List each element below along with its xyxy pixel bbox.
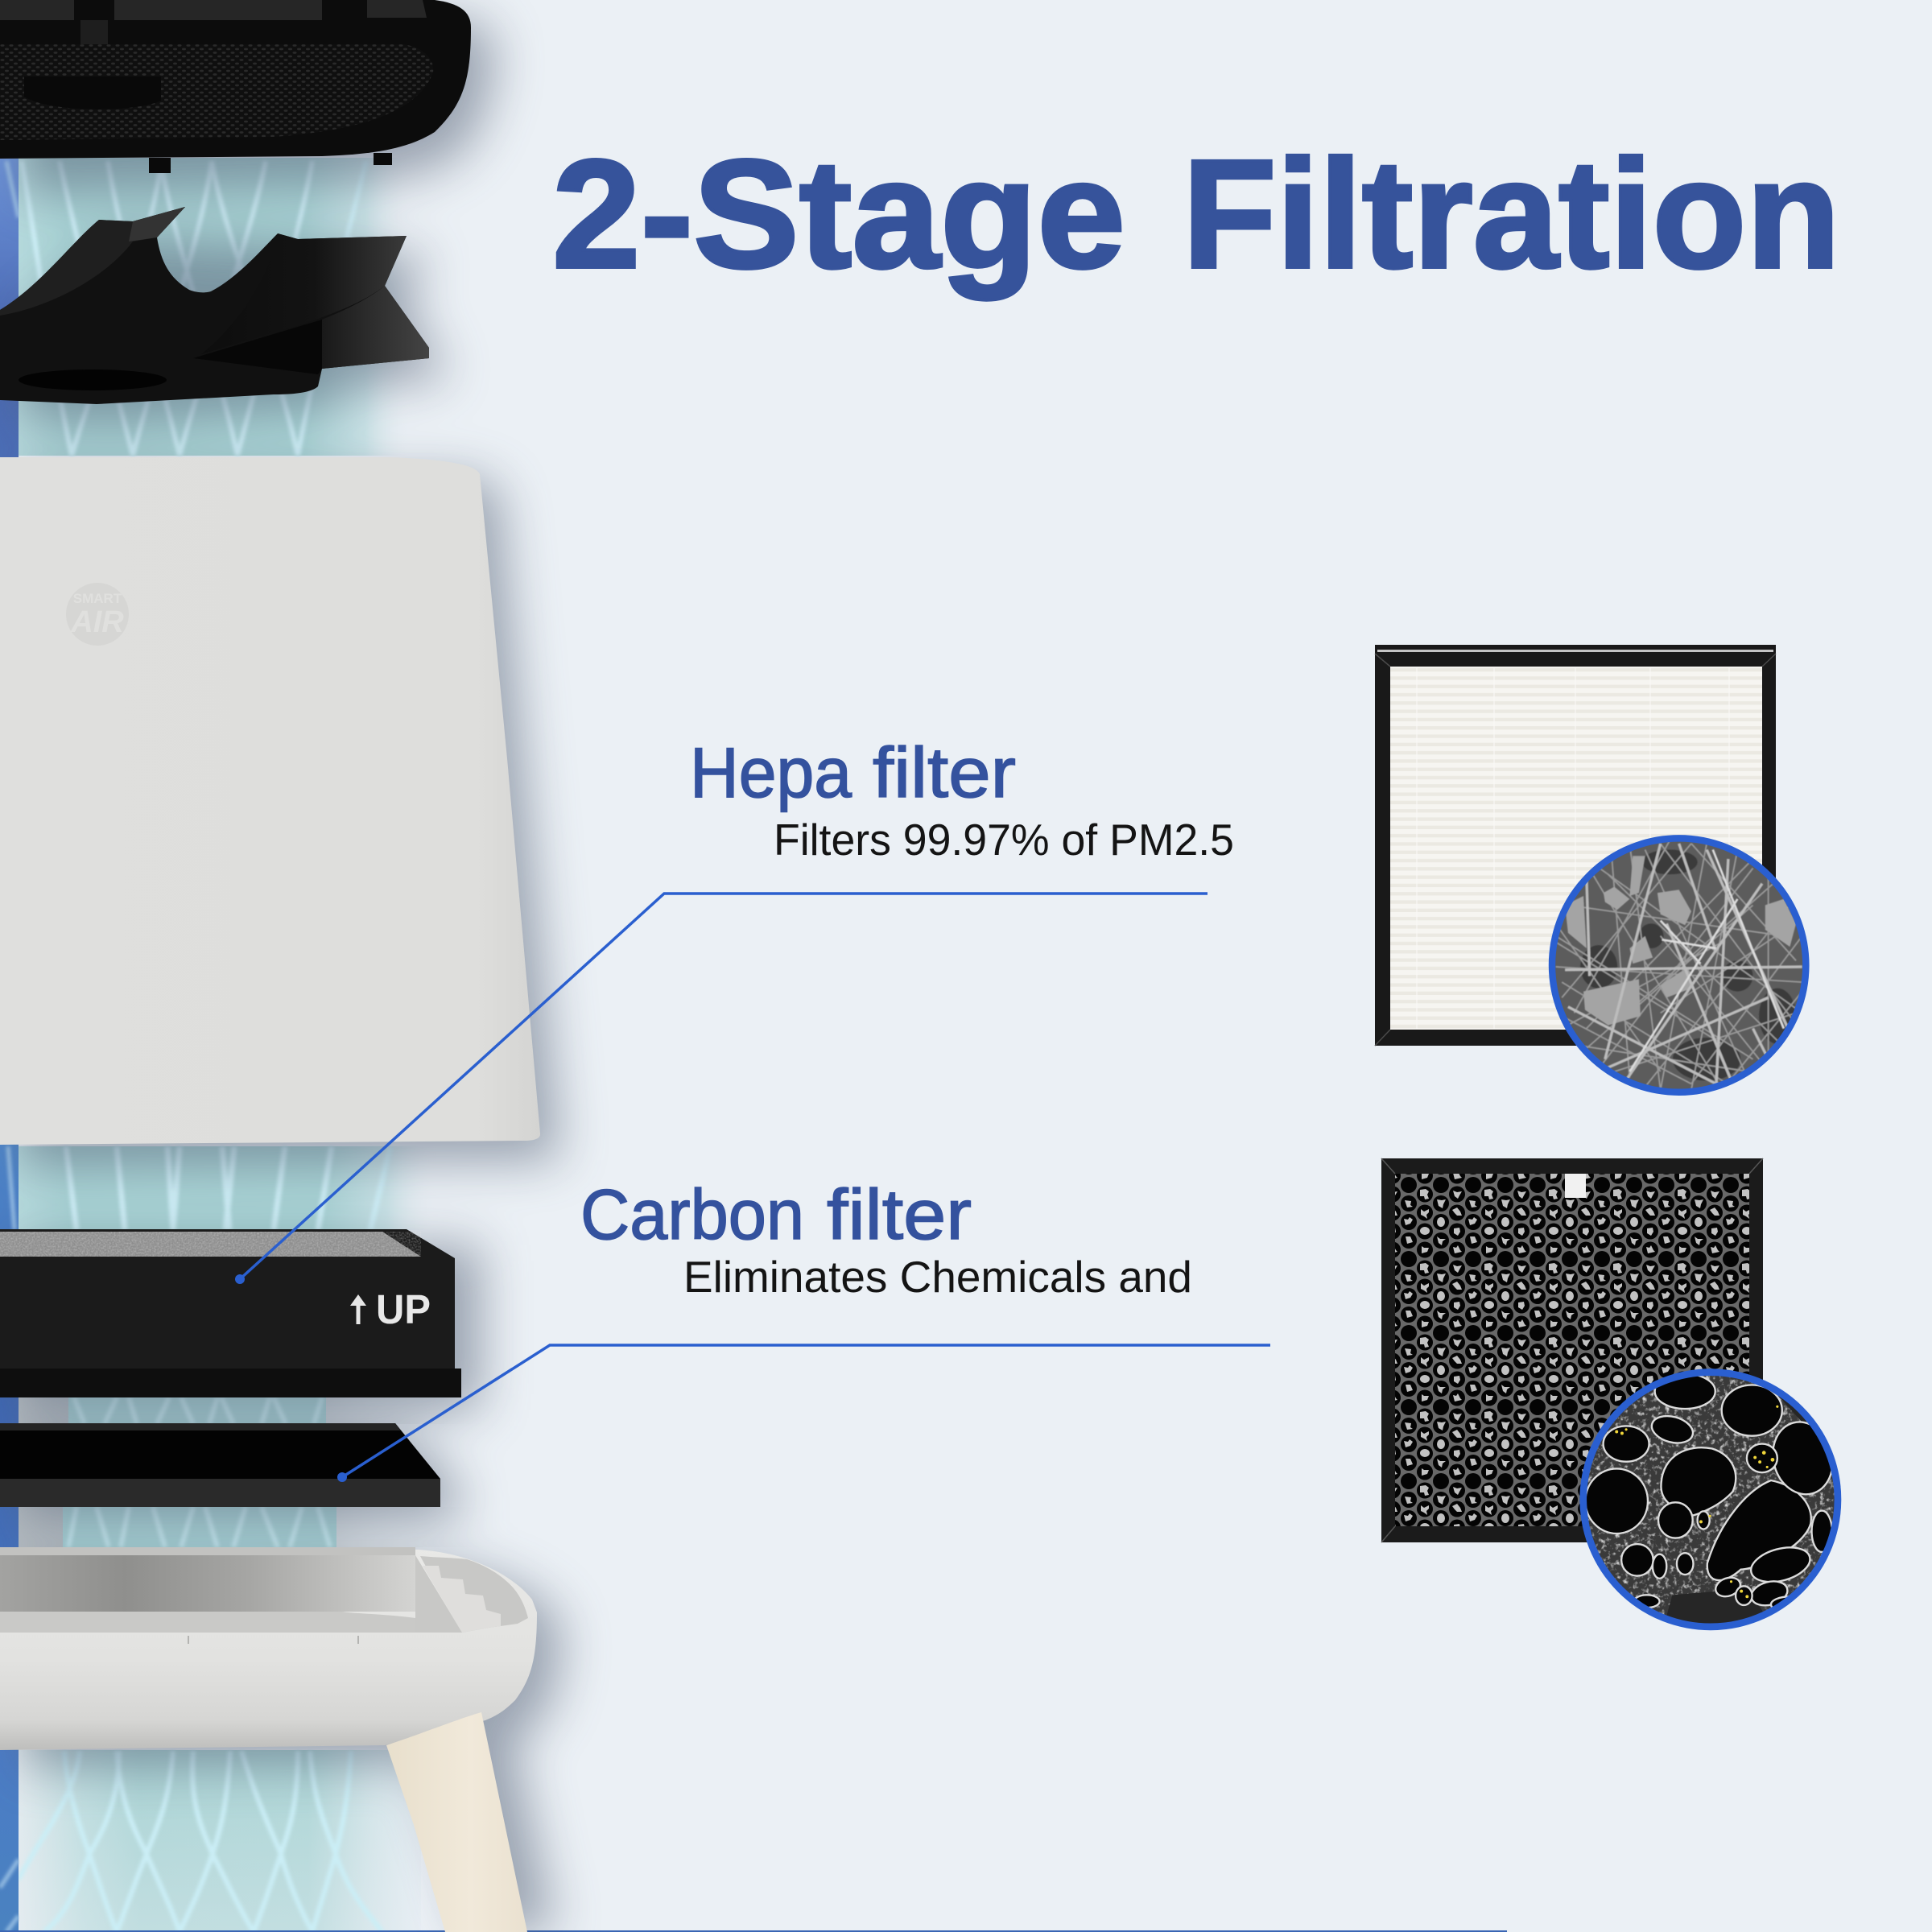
callout: carbon filter	[337, 1174, 1270, 1482]
carbon filter top edge	[0, 1423, 401, 1430]
cover clips	[149, 153, 392, 173]
base rim	[0, 1547, 415, 1555]
logo word large: AIR	[70, 605, 124, 639]
yellow particles	[1615, 1406, 1778, 1598]
bottom edge line	[0, 1930, 1507, 1932]
fan hub	[19, 369, 167, 390]
cover hub	[24, 76, 161, 109]
carbon leader line	[342, 1345, 1270, 1477]
airflow: band above carbon	[68, 1397, 326, 1424]
fibre dark gaps	[1580, 850, 1796, 1081]
carbon leader dot	[337, 1472, 347, 1482]
hepa description: Filters 99.97% of PM2.5	[774, 815, 1234, 865]
hepa filter rim	[0, 1368, 461, 1397]
carbon filter front	[0, 1479, 440, 1507]
hepa frame mitres	[1375, 654, 1776, 1046]
hepa filter top	[0, 1232, 421, 1257]
fan blade lower right	[322, 286, 429, 369]
carbon honeycomb	[1395, 1174, 1749, 1526]
hepa heading	[690, 733, 1016, 812]
fibre thin mesh	[1556, 840, 1802, 1090]
bar light streaks	[0, 161, 19, 1932]
particles	[1565, 856, 1796, 1026]
magnifier: activated carbon	[1580, 1369, 1841, 1630]
part: white outer shell	[0, 457, 540, 1145]
base back wall	[0, 1555, 415, 1612]
part: fan impeller	[0, 207, 429, 404]
base steps	[423, 1566, 501, 1633]
part: base	[0, 1547, 537, 1750]
hepa top highlight	[1377, 650, 1773, 652]
callout: hepa filter	[235, 733, 1234, 1284]
hepa ring	[1552, 838, 1806, 1092]
logo word small: SMART	[73, 591, 122, 606]
title second word: Filtration	[1183, 127, 1840, 300]
airflow: lower section	[19, 1750, 421, 1932]
up label	[350, 1286, 431, 1332]
part: top cover	[0, 0, 471, 173]
shell logo	[66, 583, 129, 646]
carbon tag	[1565, 1174, 1586, 1198]
base tick marks	[188, 1636, 358, 1644]
cover top rim	[0, 0, 427, 20]
bright strands	[1629, 850, 1784, 1071]
carbon dark patches	[1666, 1396, 1807, 1623]
airflow: band above base	[63, 1507, 336, 1547]
blue side bar	[0, 158, 19, 1932]
hepa leader dot	[235, 1274, 245, 1284]
airflow column	[19, 158, 502, 1932]
carbon heading: Carbon	[580, 1174, 804, 1254]
carbon speckle	[1587, 1376, 1834, 1615]
hepa top texture	[0, 1232, 421, 1257]
base right compartment	[420, 1556, 528, 1633]
hepa heading: Hepa	[690, 733, 852, 812]
up text: UP	[376, 1286, 431, 1332]
fan blade left	[0, 207, 185, 316]
hepa seams	[1417, 668, 1729, 1029]
carbon pores	[1585, 1374, 1840, 1612]
part: carbon filter	[0, 1423, 440, 1507]
carbon heading: filter	[827, 1174, 972, 1254]
carbon ring	[1583, 1373, 1838, 1627]
base partition	[415, 1555, 462, 1633]
fan blade upper right	[201, 233, 407, 354]
cover mesh	[0, 44, 433, 140]
hepa pleats	[1390, 667, 1762, 1030]
carbon heading	[580, 1174, 972, 1254]
title	[552, 127, 1840, 300]
title first word: 2-Stage	[552, 127, 1125, 300]
cover rim tab	[80, 20, 108, 44]
carbon frame mitres	[1381, 1158, 1763, 1542]
part: wooden leg	[386, 1712, 527, 1932]
photo: hepa filter	[1375, 645, 1776, 1046]
up arrow	[350, 1294, 366, 1324]
photo: carbon filter	[1381, 1158, 1763, 1542]
base floor	[0, 1612, 415, 1633]
shadow band above carbon	[19, 1397, 502, 1424]
fan shadow wedge	[193, 320, 322, 374]
hepa leader line	[240, 894, 1208, 1279]
airflow: middle section	[19, 1146, 437, 1230]
hepa heading: filter	[873, 733, 1016, 812]
carbon description: Eliminates Chemicals and	[683, 1252, 1192, 1302]
fibre mid mesh	[1565, 844, 1802, 1090]
drop shadows	[19, 19, 561, 1932]
fan blade tip	[129, 207, 185, 242]
magnifier: hepa fibres	[1552, 838, 1806, 1092]
airflow: upper section	[19, 158, 413, 456]
shadow band above base	[19, 1507, 493, 1547]
part: hepa filter	[0, 1229, 461, 1397]
